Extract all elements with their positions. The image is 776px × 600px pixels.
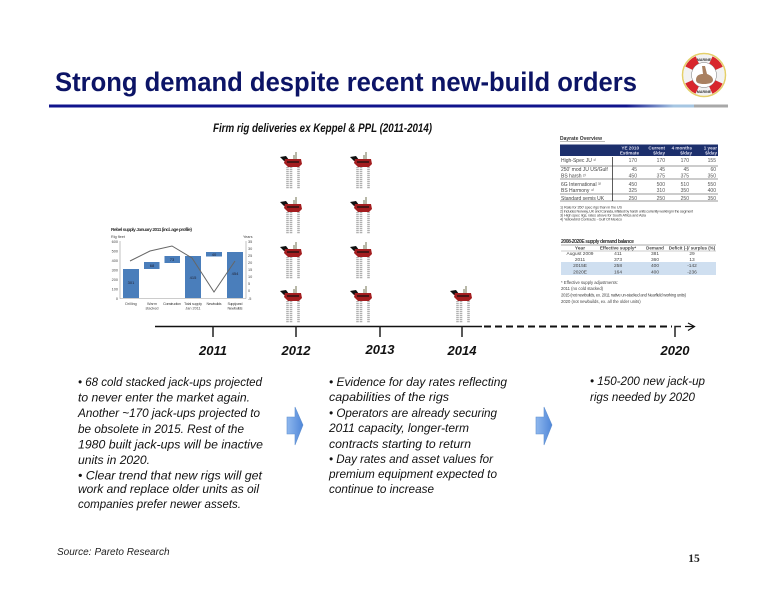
text block: day rates: continue to increase — [329, 484, 434, 496]
rig icons: 2012 — [280, 152, 302, 323]
text block: new jack-up rigs needed — [590, 376, 706, 404]
logo: lifebuoy: MARINE — [697, 90, 712, 94]
supply demand balance table: 258 — [614, 263, 622, 269]
fleet supply chart: 500 — [112, 250, 118, 254]
dayrate overview table: 400 — [708, 188, 716, 194]
fleet supply chart: Newbuilds — [206, 302, 222, 306]
fleet supply chart: 25 — [248, 254, 252, 258]
dayrate overview table: 45 — [631, 167, 637, 173]
dayrate overview table: 450 — [629, 174, 637, 180]
dayrate overview table: 155 — [708, 158, 716, 164]
dayrate overview table: BS harsh ²⁾ — [561, 174, 586, 180]
logo: lifebuoy: MARINE — [697, 58, 712, 62]
fleet supply chart: 200 — [112, 278, 118, 282]
fleet supply chart: 5 — [248, 282, 250, 286]
dayrate overview table: 500 — [657, 182, 665, 188]
dayrate overview table: 60 — [710, 167, 716, 173]
supply demand balance table: 400 — [651, 270, 659, 276]
dayrate overview table: 45 — [659, 167, 665, 173]
fleet supply chart: 0 — [116, 297, 118, 301]
text block: day rates: • Operators are already securing — [329, 408, 498, 420]
title: Strong demand despite recent new-build orders — [55, 67, 637, 97]
timeline — [155, 323, 694, 358]
supply demand balance table: 29 — [689, 251, 695, 257]
fleet supply chart: Construction — [163, 302, 181, 306]
dayrate overview table: Current — [648, 146, 665, 150]
text block: day rates: • Evidence for day rates reflecting — [329, 377, 508, 389]
text block: cold stacked jack-ups: units in 2020. — [78, 455, 150, 467]
fleet supply chart: Years — [243, 235, 253, 239]
fleet supply chart: 415 — [190, 275, 197, 280]
fleet supply chart: stacked — [145, 306, 159, 310]
text block: cold stacked jack-ups: work and replace older units as oil — [78, 484, 259, 496]
supply demand balance table: 373 — [614, 257, 622, 263]
fleet supply chart: Rebel supply January 2011 (incl. age profile) — [111, 227, 192, 233]
dayrate overview table: 250' mod JU US/Gulf — [561, 167, 608, 173]
supply demand balance table: Effective supply* — [600, 246, 636, 250]
fleet supply chart: Total supply — [184, 302, 202, 306]
fleet supply chart: 30 — [248, 247, 252, 251]
supply demand balance table: -142 — [687, 263, 697, 269]
fleet supply chart: Supply and — [228, 302, 242, 306]
dayrate overview table: 170 — [629, 158, 637, 164]
text block: cold stacked jack-ups: • 68 cold stacked jack-ups projected — [78, 377, 263, 389]
dayrate overview table — [560, 136, 718, 222]
supply demand balance table: 164 — [614, 270, 622, 276]
dayrate overview table: 350 — [708, 174, 716, 180]
fleet supply chart: 68 — [150, 263, 155, 268]
fleet supply chart: 15 — [248, 268, 252, 272]
fleet supply chart: 20 — [248, 261, 252, 265]
fleet supply chart: Warm — [147, 302, 157, 306]
timeline: 2014 — [447, 343, 477, 358]
fleet supply chart: -5 — [248, 297, 251, 301]
text block: cold stacked jack-ups: Another ~170 jack-ups projected to — [77, 408, 261, 420]
text block: day rates: capabilities of the rigs — [329, 392, 449, 404]
text block: cold stacked jack-ups: be obsolete in 2015. Rest of the — [78, 424, 244, 436]
text block: day rates: 2011 capacity, longer-term — [328, 423, 469, 435]
supply demand balance table: 2015E — [573, 263, 587, 269]
supply demand balance table: 13 — [689, 257, 695, 263]
dayrate overview table: Dayrate Overview — [560, 136, 602, 142]
timeline: 2013 — [365, 342, 395, 357]
dayrate overview table: 2) Includes Norway, UK and Canada, inflated by harsh units currently working in the segment — [560, 210, 694, 214]
logo: lifebuoy — [681, 52, 727, 98]
text block: cold stacked jack-ups: 1980 built jack-ups will be inactive — [78, 440, 263, 452]
fleet supply chart: 300 — [112, 268, 118, 272]
fleet supply chart: 10 — [248, 275, 252, 279]
supply demand balance table: 2011 (no cold stacked) — [561, 286, 604, 291]
fleet supply chart: 301 — [128, 280, 135, 285]
dayrate overview table: 250 — [657, 196, 665, 202]
dayrate overview table: 310 — [657, 188, 665, 194]
supply demand balance table: August 2009 — [567, 251, 594, 257]
fleet supply chart: 35 — [248, 240, 252, 244]
supply demand balance table: 2020E — [573, 270, 587, 276]
fleet supply chart: 40 — [212, 252, 217, 257]
rig icon: 2014 — [450, 286, 472, 323]
dayrate overview table: 4) Yellowbird Contracts - Gulf Of Mexico — [560, 218, 622, 222]
supply demand balance table — [561, 239, 716, 304]
text block: cold stacked jack-ups: to never enter the market again. — [78, 392, 250, 404]
dayrate overview table: 450 — [629, 182, 637, 188]
fleet supply chart: Jan 2011 — [185, 306, 201, 310]
dayrate overview table: 45 — [683, 167, 689, 173]
fleet supply chart: 0 — [248, 289, 250, 293]
dayrate overview table: 325 — [629, 188, 637, 194]
dayrate overview table: Estimate — [620, 150, 639, 156]
dayrate overview table: 375 — [681, 174, 689, 180]
dayrate overview table: $/day — [680, 150, 692, 156]
dayrate overview table: 1 year — [704, 146, 717, 150]
supply demand balance table: 381 — [651, 251, 659, 257]
fleet supply chart: 454 — [232, 271, 239, 276]
rig icons: 2013 — [350, 152, 372, 323]
text block: day rates: • Day rates and asset values for — [329, 454, 494, 466]
supply demand balance table: 360 — [651, 257, 659, 263]
supply demand balance table: Year — [575, 246, 585, 252]
dayrate overview table: BS Harmony ⁴⁾ — [561, 188, 594, 194]
fleet supply chart: Drilling — [125, 302, 137, 306]
dayrate overview table: 170 — [681, 158, 689, 164]
dayrate overview table: 510 — [681, 182, 689, 188]
fleet supply chart: 600 — [112, 240, 118, 244]
dayrate overview table: 3) High spec rigs, rates above for South Africa and Asia — [560, 214, 647, 218]
timeline: 2011 — [198, 343, 227, 358]
dayrate overview table: 6G International ³⁾ — [561, 182, 601, 188]
supply demand balance table: 2008-2020E supply demand balance — [561, 239, 634, 245]
arrow: first to second column — [287, 407, 303, 445]
supply demand balance table: -236 — [687, 270, 697, 276]
fleet supply chart: 400 — [112, 259, 118, 263]
dayrate overview table: High-Spec JU ¹⁾ — [561, 158, 596, 164]
chart heading: Firm rig deliveries ex Keppel & PPL (2011-2014) — [213, 123, 432, 135]
supply demand balance table: 411 — [614, 251, 622, 257]
dayrate overview table: 250 — [629, 196, 637, 202]
timeline: 2012 — [281, 343, 311, 358]
text block: day rates — [328, 377, 508, 496]
dayrate overview table: 350 — [708, 196, 716, 202]
arrow: second to third column — [536, 407, 552, 445]
source note: Source: Pareto Research — [57, 547, 170, 558]
supply demand balance table: 400 — [651, 263, 659, 269]
page number: 15 — [688, 553, 700, 565]
supply demand balance table: 2015 (not newbuilds, ex. 2011 native un-stacked and Nearfield working units) — [561, 292, 687, 298]
fleet supply chart: Newbuilds — [228, 306, 243, 310]
text block: cold stacked jack-ups: • Clear trend that new rigs will get — [78, 470, 263, 482]
dayrate overview table: $/day — [653, 150, 665, 156]
dayrate overview table: 250 — [681, 196, 689, 202]
text block: cold stacked jack-ups — [77, 377, 263, 511]
dayrate overview table: 375 — [657, 174, 665, 180]
supply demand balance table: Deficit (-)/ surplus (%) — [669, 246, 716, 250]
supply demand balance table: 2020 (not newbuilds, ex. all the older units) — [561, 299, 641, 304]
dayrate overview table: 1) Rate for 350' spec rigs than in the US — [560, 206, 622, 210]
dayrate overview table: 170 — [657, 158, 665, 164]
text block: day rates: contracts starting to return — [329, 439, 471, 451]
dayrate overview table: 550 — [708, 182, 716, 188]
fleet supply chart — [111, 227, 253, 310]
supply demand balance table: * Effective supply adjustments: — [561, 280, 618, 285]
dayrate overview table: Standard semis UK — [561, 196, 605, 202]
dayrate overview table: $/day — [705, 150, 717, 156]
fleet supply chart: Rig fleet — [111, 235, 126, 239]
dayrate overview table: 4 months — [672, 146, 692, 150]
supply demand balance table: Demand — [646, 246, 664, 250]
dayrate overview table: 350 — [681, 188, 689, 194]
fleet supply chart: 73 — [170, 257, 175, 262]
text block: new jack-up rigs needed: • 150-200 new jack-up — [590, 376, 706, 388]
text block: day rates: premium equipment expected to — [328, 469, 498, 481]
dayrate overview table: YE 2010 — [621, 146, 639, 150]
fleet supply chart: 100 — [112, 288, 118, 292]
supply demand balance table: 2011 — [575, 257, 585, 263]
text block: new jack-up rigs needed: rigs needed by 2020 — [590, 392, 696, 404]
text block: cold stacked jack-ups: companies prefer newer assets. — [78, 499, 241, 511]
timeline: 2020 — [660, 343, 690, 358]
